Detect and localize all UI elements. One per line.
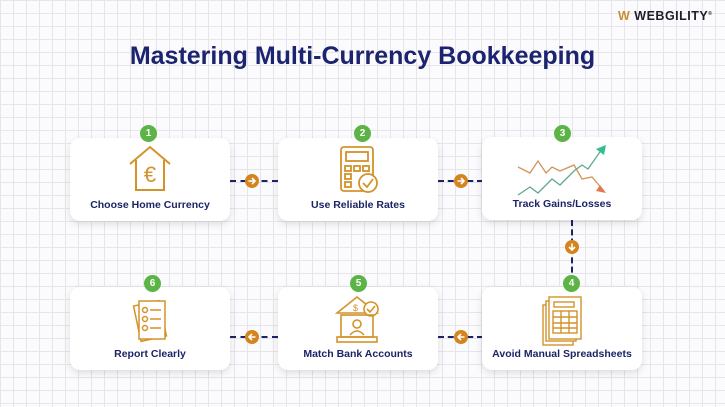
label: Report Clearly [114,348,186,360]
icon: chart lines [518,145,606,196]
badge 5: 5 [356,278,361,289]
panel: step 2 [278,138,438,221]
label: Match Bank Accounts [303,348,413,360]
badge 1 [140,125,157,142]
icon: bank [334,296,380,343]
badge 6 [144,275,161,292]
badge 2 [354,125,371,142]
panel: step 5 [278,287,438,370]
label: Choose Home Currency [90,199,210,211]
icon: house euro: € [144,162,156,187]
badge 1: 1 [146,128,151,139]
badge 5 [350,275,367,292]
label: Avoid Manual Spreadsheets [492,348,632,360]
badge 4: 4 [569,278,574,289]
icon: calculator [340,146,378,193]
label: Use Reliable Rates [311,199,405,211]
connector 1-2 [230,180,278,182]
connector 3-4 [571,220,573,282]
badge 3 [554,125,571,142]
panel: step 4 [482,287,642,370]
badge 3: 3 [560,128,565,139]
badge 6: 6 [150,278,155,289]
panel: step 3 [482,137,642,220]
icon: report checklist [132,300,168,342]
arrow 1-2 [245,174,259,188]
label: Track Gains/Losses [513,198,611,210]
arrow 2-3 [454,174,468,188]
connector 2-3 [438,180,483,182]
panel: step 1 [70,138,230,221]
logo: W WEBGILITY® [618,9,712,23]
icon: house euro [129,146,171,191]
arrow 5-6 [245,330,259,344]
arrow 3-4 [565,240,579,254]
badge 2: 2 [360,128,365,139]
icon: bank: $ [353,303,358,313]
badge 4 [563,275,580,292]
connector 5-4 [438,336,483,338]
arrow 4-5 [454,330,468,344]
icon: spreadsheets [542,296,582,346]
connector 6-5 [230,336,278,338]
title: Mastering Multi-Currency Bookkeeping [130,42,595,70]
panel: step 6 [70,287,230,370]
